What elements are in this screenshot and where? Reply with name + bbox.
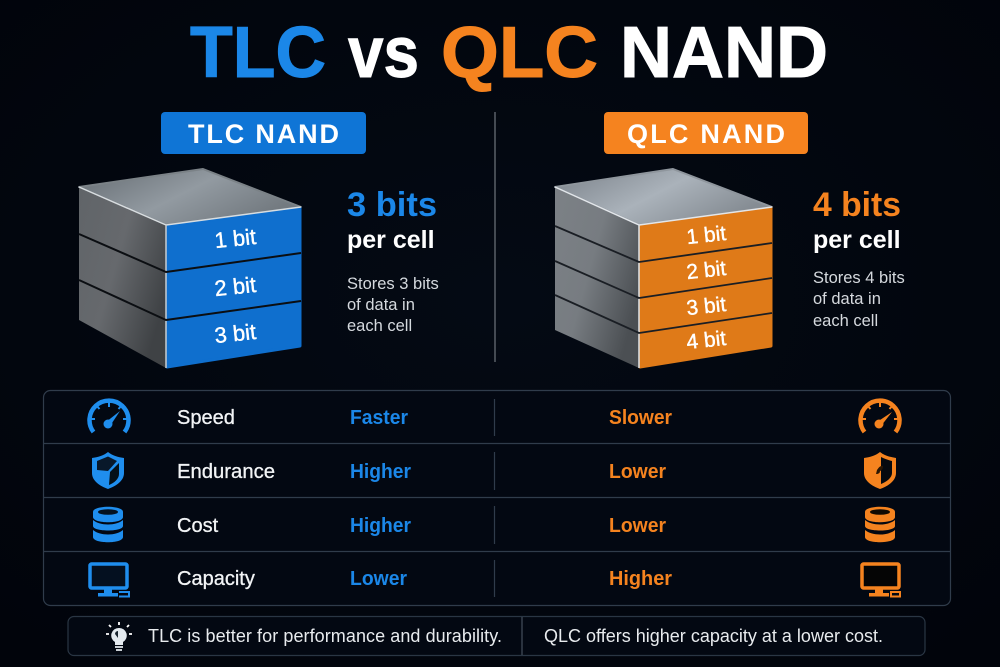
text block: TLC 3 bits per cell: 3 bits: [347, 186, 437, 224]
icon: blue database: [93, 507, 123, 542]
chart: QLC four layer stack: 4 bit: [685, 327, 727, 354]
text: TLC summary: TLC is better for performance and durability.: [148, 626, 502, 646]
row: cost: Cost: [177, 515, 219, 537]
row: cost: Lower: [609, 515, 666, 537]
panel: comparison table: [44, 390, 950, 606]
text: QLC summary: QLC offers higher capacity at a lower cost.: [544, 626, 883, 646]
text block: TLC 3 bits per cell: Stores 3 bits: [347, 275, 439, 293]
icon: orange database: [865, 507, 895, 542]
heading: QLC NAND badge: [604, 112, 808, 154]
icon: orange gauge: [860, 400, 900, 432]
text block: QLC 4 bits per cell: per cell: [813, 226, 901, 254]
row: speed: Faster: [350, 407, 408, 429]
row: capacity: Lower: [350, 568, 407, 590]
text block: QLC 4 bits per cell: [813, 186, 905, 330]
panel: QLC NAND: [555, 112, 905, 368]
row: cost: Higher: [350, 515, 411, 537]
text block: QLC 4 bits per cell: each cell: [813, 312, 878, 330]
callout: summary bar: [68, 616, 925, 656]
icon: blue monitor: [90, 564, 129, 596]
panel: TLC NAND: [79, 112, 439, 368]
chart: QLC four layer stack: [555, 169, 772, 368]
row: endurance: Higher: [350, 461, 411, 483]
row: capacity: Capacity: [177, 568, 255, 590]
row: speed: [177, 407, 672, 429]
text block: QLC 4 bits per cell: of data in: [813, 290, 881, 308]
chart: QLC four layer stack: 1 bit: [685, 222, 727, 249]
row: capacity: Higher: [609, 568, 672, 590]
title: [190, 13, 828, 93]
icon: light bulb: [106, 622, 132, 650]
chart: TLC three layer stack: 1 bit: [213, 224, 257, 253]
chart: QLC four layer stack: 3 bit: [685, 293, 727, 320]
title: NAND: [620, 13, 828, 93]
text block: TLC 3 bits per cell: each cell: [347, 317, 412, 335]
row: cost: [177, 515, 666, 537]
chart: TLC three layer stack: [79, 169, 301, 368]
heading: QLC NAND badge: QLC NAND: [627, 119, 785, 149]
text block: TLC 3 bits per cell: of data in: [347, 296, 415, 314]
icon: orange monitor: [862, 564, 900, 596]
heading: TLC NAND badge: TLC NAND: [188, 119, 339, 149]
row: endurance: [177, 461, 666, 483]
text block: QLC 4 bits per cell: Stores 4 bits: [813, 269, 905, 287]
heading: TLC NAND badge: [161, 112, 366, 154]
chart: TLC three layer stack: 2 bit: [213, 272, 257, 301]
title: vs: [348, 13, 419, 93]
text block: QLC 4 bits per cell: 4 bits: [813, 186, 901, 224]
row: endurance: Lower: [609, 461, 666, 483]
row: speed: Slower: [609, 407, 672, 429]
title: QLC: [441, 13, 598, 93]
icon: blue gauge: [90, 400, 128, 432]
icon: blue shield: [92, 452, 124, 489]
row: endurance: Endurance: [177, 461, 275, 483]
title: TLC: [190, 13, 326, 93]
text block: TLC 3 bits per cell: [347, 186, 439, 335]
row: capacity: [177, 568, 672, 590]
icon: orange shield: [864, 452, 896, 489]
chart: QLC four layer stack: 2 bit: [685, 257, 727, 284]
row: speed: Speed: [177, 407, 235, 429]
chart: TLC three layer stack: 3 bit: [213, 319, 257, 348]
text block: TLC 3 bits per cell: per cell: [347, 226, 435, 254]
